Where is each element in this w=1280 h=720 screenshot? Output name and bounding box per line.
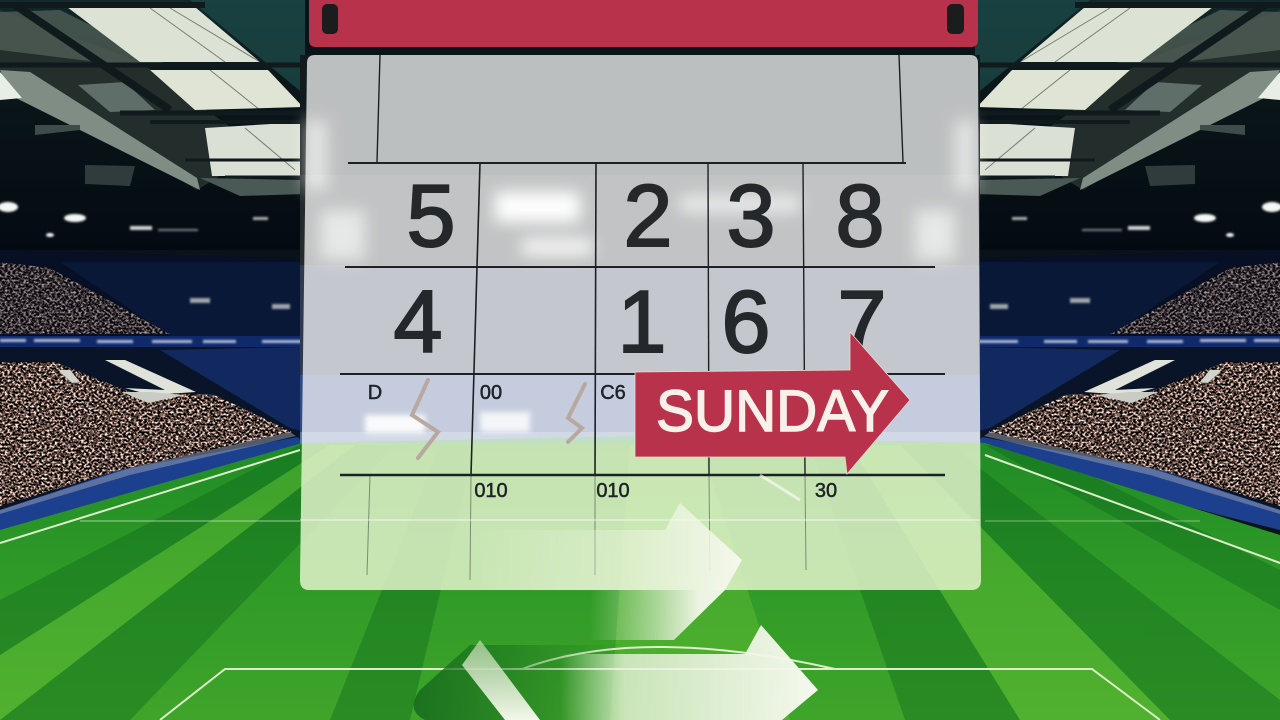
small date labels: 010 — [474, 480, 508, 502]
right stand — [975, 0, 1280, 530]
digit row two: 1 — [618, 272, 666, 371]
Sunday arrow callout — [635, 332, 910, 474]
dark green shadow block — [414, 645, 620, 720]
small date labels: C6 — [600, 382, 626, 404]
upper arrow — [470, 503, 742, 590]
digit row one: 2 — [624, 166, 672, 265]
digit row two: 4 — [394, 272, 442, 371]
upper arrow lower segment — [590, 590, 725, 640]
small date labels: D — [368, 382, 382, 404]
yellow-green tint over pitch — [300, 443, 981, 590]
bar body — [309, 0, 978, 47]
digit row one: 5 — [407, 166, 455, 265]
white arrows on pitch — [414, 503, 818, 720]
stadium centre behind the calendar — [300, 55, 980, 444]
left stand — [0, 0, 305, 530]
left binder slot — [322, 4, 338, 34]
small date labels: 010 — [596, 480, 630, 502]
diagonal chevron — [462, 640, 540, 720]
right binder slot — [947, 4, 964, 34]
football pitch — [0, 430, 1280, 720]
red arrow shape — [635, 332, 910, 474]
red header bar — [309, 0, 978, 47]
calendar panel — [300, 55, 981, 590]
small date labels: 30 — [815, 480, 837, 502]
small date labels — [368, 382, 837, 502]
pitch mowing stripes — [0, 445, 1280, 720]
pitch markings — [0, 450, 1280, 720]
digit row one — [407, 166, 884, 265]
Sunday label: SUNDAY — [656, 379, 889, 444]
lower arrow — [560, 625, 818, 720]
digit row two: 7 — [838, 272, 886, 371]
faint band line through panel — [300, 519, 980, 521]
panel translucent body — [300, 55, 981, 590]
digit row two — [394, 272, 886, 371]
digit row one: 8 — [836, 166, 884, 265]
digit row two: 6 — [722, 272, 770, 371]
digit row one: 3 — [727, 166, 775, 265]
grid lines — [340, 55, 945, 580]
small date labels: 00 — [480, 382, 502, 404]
small reflected lightning marks — [412, 380, 585, 458]
faint pitch lines through panel — [760, 475, 800, 500]
